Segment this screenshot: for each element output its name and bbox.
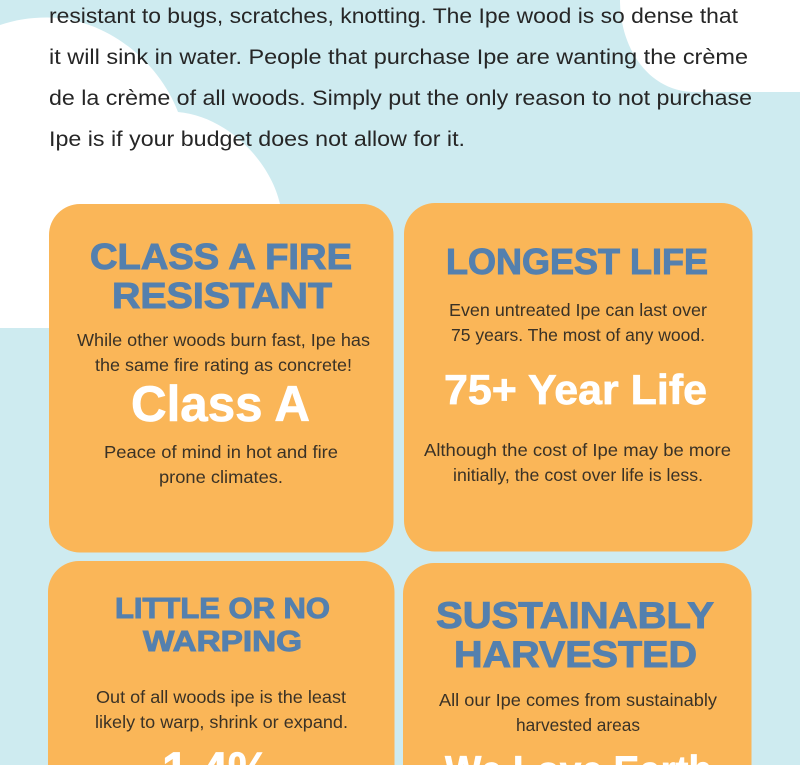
text: sustainability description: harvested areas (516, 715, 640, 735)
intro paragraph: Ipe is if your budget does not allow for it. (49, 127, 465, 151)
top right white cloud (620, 0, 800, 92)
heading: little or no warping (115, 593, 330, 658)
heading: sustainably harvested: HARVESTED (454, 634, 697, 675)
heading: longest life: LONGEST LIFE (446, 241, 708, 282)
panel: sustainably harvested (403, 563, 752, 765)
text: sustainability description (439, 690, 717, 735)
panel: longest life (404, 203, 752, 552)
heading: sustainably harvested: SUSTAINABLY (436, 595, 714, 636)
panel: class A fire resistant (49, 204, 394, 552)
text: peace of mind: Peace of mind in hot and fire (104, 442, 338, 462)
stat: Class A: Class A (131, 376, 310, 432)
text: fire rating description: the same fire rating as concrete! (95, 355, 352, 375)
text: cost over life (424, 440, 731, 485)
panel: little or no warping (48, 561, 394, 765)
text: sustainability description: All our Ipe comes from sustainably (439, 690, 717, 710)
text: peace of mind (104, 442, 338, 487)
text: peace of mind: prone climates. (159, 467, 283, 487)
text: cost over life: Although the cost of Ipe may be more (424, 440, 731, 460)
heading: little or no warping: LITTLE OR NO (115, 593, 330, 625)
heading: class A fire resistant (90, 236, 352, 316)
text: fire rating description (77, 330, 370, 375)
text: warping description: Out of all woods ipe is the least (96, 687, 346, 707)
intro paragraph: resistant to bugs, scratches, knotting. The Ipe wood is so dense that (49, 4, 738, 28)
text: lifespan description: Even untreated Ipe can last over (449, 300, 707, 320)
intro paragraph (49, 4, 752, 151)
stat: 75+ year life: 75+ Year Life (444, 366, 707, 413)
text: warping description: likely to warp, shrink or expand. (95, 712, 348, 732)
heading: class A fire resistant: RESISTANT (112, 275, 332, 316)
text: fire rating description: While other woods burn fast, Ipe has (77, 330, 370, 350)
text: lifespan description (449, 300, 707, 345)
intro paragraph: it will sink in water. People that purchase Ipe are wanting the crème (49, 45, 748, 69)
intro paragraph: de la crème of all woods. Simply put the only reason to not purchase (49, 86, 752, 110)
heading: sustainably harvested (436, 595, 714, 675)
text: lifespan description: 75 years. The most of any wood. (451, 325, 705, 345)
left white cloud (0, 18, 290, 328)
heading: little or no warping: WARPING (143, 626, 302, 658)
text: warping description (95, 687, 348, 732)
text: cost over life: initially, the cost over life is less. (453, 465, 703, 485)
heading: class A fire resistant: CLASS A FIRE (90, 236, 352, 277)
